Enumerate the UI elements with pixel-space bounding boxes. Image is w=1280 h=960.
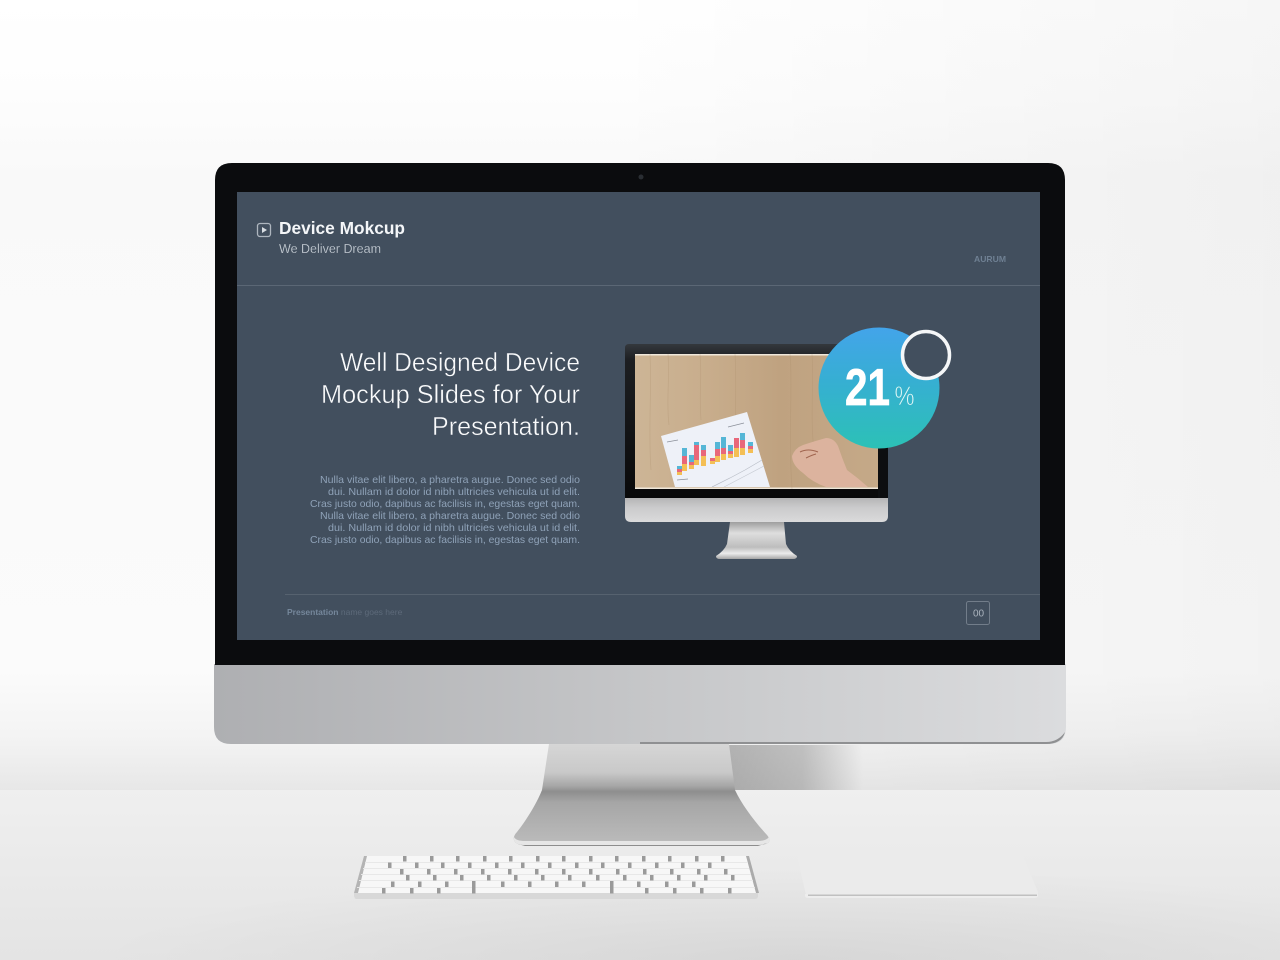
monitor stand	[514, 744, 770, 846]
mini screen right bezel mask	[878, 400, 888, 498]
mini photo: desk with chart and fist	[635, 354, 878, 489]
paper with chart	[661, 412, 770, 487]
slide screen	[237, 192, 1040, 640]
main heading: Well Designed Device	[340, 347, 580, 377]
keyboard	[354, 856, 759, 899]
badge value: 21	[845, 359, 890, 417]
body paragraph: dui. Nullam id dolor id nibh ultricies vehicula ut id elit.	[328, 486, 580, 498]
desktop monitor	[214, 163, 1066, 846]
brand label: AURUM	[974, 254, 1006, 264]
percentage badge	[818, 328, 950, 448]
body paragraph: dui. Nullam id dolor id nibh ultricies vehicula ut id elit.	[328, 522, 580, 534]
fist	[792, 438, 868, 487]
key row lines	[357, 862, 755, 888]
footer text: Presentation name goes here	[287, 607, 403, 617]
main heading	[321, 347, 580, 441]
key gaps	[382, 856, 734, 894]
page number box	[966, 602, 990, 624]
slide title: Device Mokcup	[279, 218, 405, 238]
main heading: Mockup Slides for Your	[321, 379, 580, 409]
monitor bezel	[215, 163, 1065, 665]
icon: play button	[258, 224, 270, 236]
monitor shadow on wall	[728, 745, 863, 790]
monitor chin	[214, 664, 1066, 744]
mini bezel	[625, 344, 888, 498]
body paragraph	[310, 474, 580, 546]
slide subtitle: We Deliver Dream	[279, 241, 381, 256]
body paragraph: Nulla vitae elit libero, a pharetra augue. Donec sed odio	[320, 474, 580, 486]
webcam	[638, 174, 644, 180]
mini stand	[716, 522, 797, 559]
trackpad	[797, 852, 1038, 898]
page number box: 00	[973, 608, 984, 620]
badge percent sign: %	[894, 381, 914, 411]
footer divider	[285, 594, 1040, 595]
body paragraph: Nulla vitae elit libero, a pharetra augue. Donec sed odio	[320, 510, 580, 522]
mini monitor	[625, 344, 888, 559]
body paragraph: Cras justo odio, dapibus ac facilisis in, egestas eget quam.	[310, 498, 580, 510]
header divider	[237, 285, 1040, 286]
mini chin	[625, 498, 888, 522]
body paragraph: Cras justo odio, dapibus ac facilisis in, egestas eget quam.	[310, 534, 580, 546]
badge ring	[902, 332, 950, 378]
main heading: Presentation.	[432, 411, 580, 441]
desk surface	[0, 790, 1280, 960]
